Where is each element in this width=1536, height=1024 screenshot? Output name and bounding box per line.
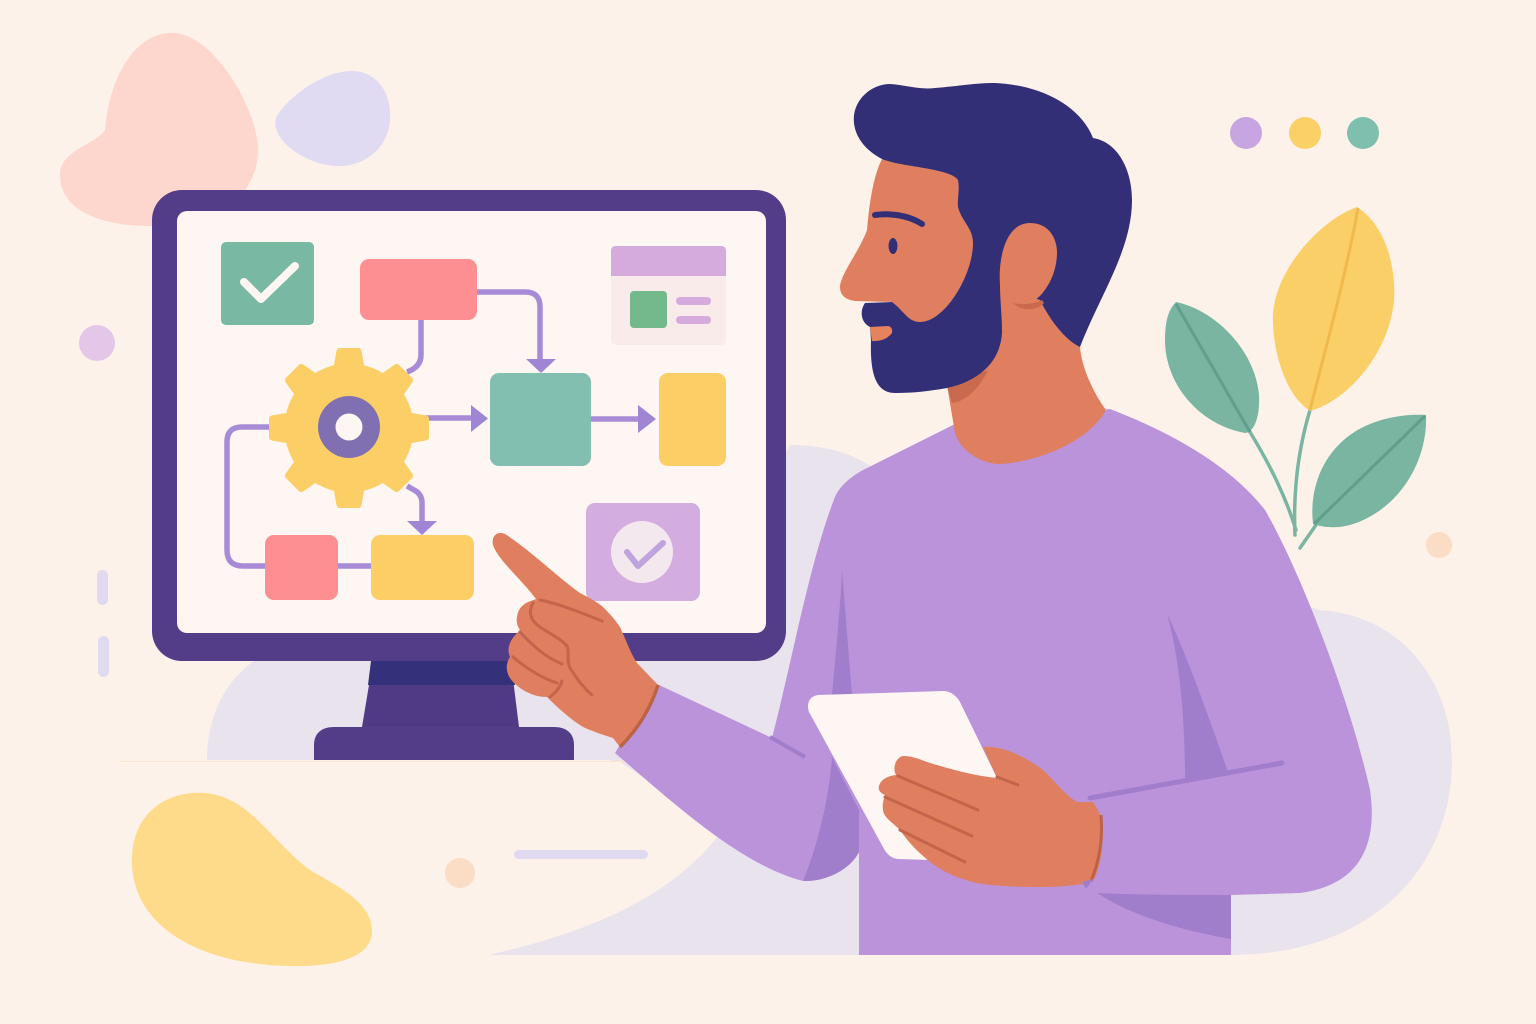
process box: yellow right bbox=[659, 373, 726, 466]
decorative dots: top right bbox=[1230, 117, 1379, 149]
connector lines bbox=[227, 292, 640, 566]
background blob: yellow bbox=[132, 793, 372, 966]
leaf: left green bbox=[1165, 302, 1259, 433]
background blob: pink bbox=[60, 33, 258, 226]
decorative dot: right peach bbox=[1426, 532, 1452, 558]
neck shadow bbox=[947, 370, 988, 403]
decorative bar: bottom bbox=[514, 850, 648, 859]
desk line bbox=[120, 761, 640, 763]
monitor stand neck bbox=[362, 655, 519, 727]
neck bbox=[947, 280, 1106, 464]
decorative dot: bottom peach bbox=[445, 858, 475, 888]
mouth bbox=[870, 326, 892, 341]
process box: pink bottom bbox=[265, 535, 338, 600]
sweater fold: arm line bbox=[1090, 763, 1282, 798]
decorative dot: left lilac bbox=[79, 325, 115, 361]
hand: holding tablet bbox=[879, 747, 1103, 889]
sweater fold: lower shadow bbox=[1097, 893, 1231, 939]
process box: teal bbox=[490, 373, 591, 466]
leaf: yellow bbox=[1273, 207, 1394, 411]
sweater fold: left bbox=[832, 570, 852, 695]
decorative pills: left bbox=[97, 570, 109, 677]
background shape: behind monitor and person bbox=[207, 445, 1452, 955]
background blob: lavender bbox=[275, 71, 390, 166]
plant bbox=[1165, 207, 1426, 548]
leaf: right green bbox=[1312, 415, 1426, 527]
monitor stand base bbox=[314, 727, 574, 760]
process box: yellow bottom bbox=[371, 535, 474, 600]
monitor bbox=[152, 190, 786, 760]
icon: gear bbox=[272, 352, 426, 504]
ear bbox=[1000, 223, 1057, 305]
icon: window card bbox=[611, 246, 726, 345]
sweater fold: elbow crease bbox=[770, 737, 805, 757]
eye bbox=[888, 238, 898, 254]
icon: green check card bbox=[221, 242, 314, 325]
icon: purple check card bbox=[586, 503, 700, 601]
ear shadow bbox=[1013, 300, 1044, 309]
monitor screen bbox=[177, 211, 766, 633]
plant stems bbox=[1250, 410, 1318, 548]
monitor frame bbox=[152, 190, 786, 661]
tablet bbox=[808, 691, 997, 860]
sweater torso bbox=[615, 409, 1372, 955]
person bbox=[493, 83, 1372, 955]
process box: pink top bbox=[360, 259, 477, 320]
sweater fold: right bbox=[1167, 614, 1228, 780]
hand: pointing bbox=[493, 533, 658, 747]
head face bbox=[840, 159, 985, 335]
hair and beard bbox=[854, 83, 1132, 393]
background cover: desk foreground bbox=[120, 762, 722, 955]
connector arrowheads bbox=[407, 359, 656, 535]
eyebrow bbox=[875, 214, 922, 224]
sweater fold: elbow bbox=[803, 757, 859, 881]
